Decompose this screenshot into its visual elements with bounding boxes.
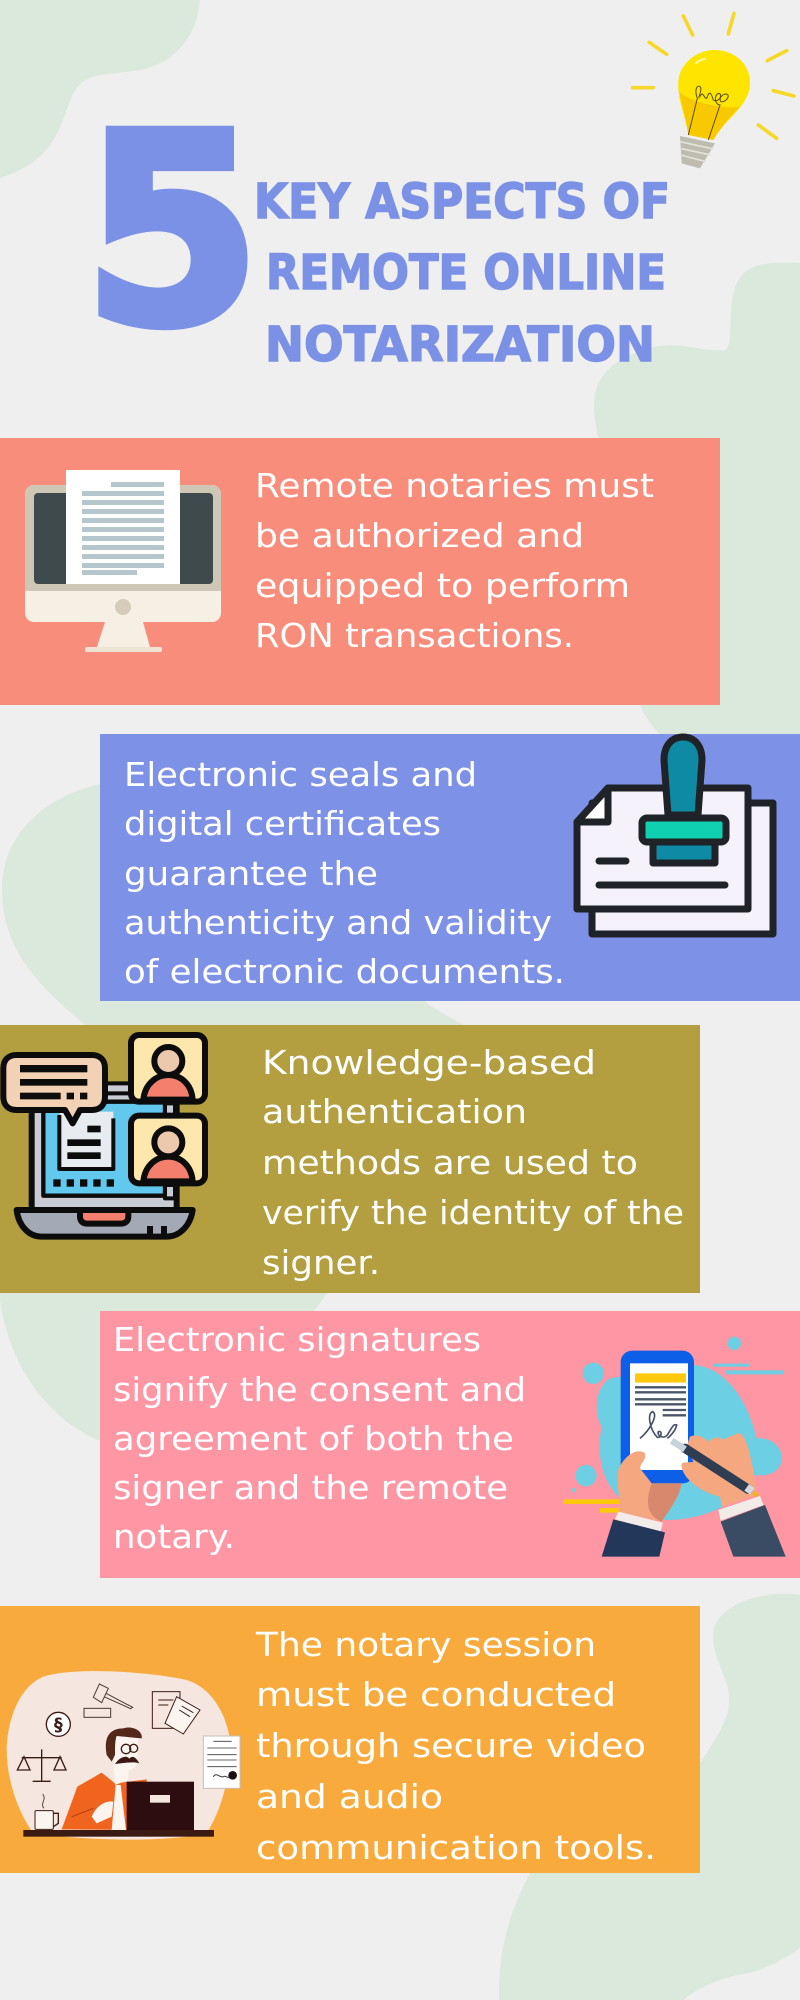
section symbol coin xyxy=(46,1712,70,1736)
text block: Electronic seals and xyxy=(124,755,477,794)
text block: be authorized and xyxy=(255,516,584,555)
heading text: NOTARIZATION xyxy=(265,317,655,373)
text block: signer and the remote xyxy=(113,1468,508,1507)
title xyxy=(83,79,670,385)
text block: agreement of both the xyxy=(113,1419,514,1458)
text block xyxy=(262,1043,684,1282)
section symbol coin: § xyxy=(54,1716,63,1736)
text block xyxy=(124,755,565,991)
heading text: REMOTE ONLINE xyxy=(266,245,666,301)
icon: hand signing on a phone xyxy=(563,1337,786,1557)
text block: Electronic signatures xyxy=(113,1320,481,1359)
panel: electronic signatures xyxy=(100,1311,800,1578)
icon: laptop with chat and video avatars xyxy=(3,1035,205,1237)
text block: digital certificates xyxy=(124,804,441,843)
icon: notary at laptop xyxy=(7,1671,240,1840)
panel: electronic seals xyxy=(100,734,800,1001)
text block: verify the identity of the xyxy=(262,1193,684,1232)
text block: notary. xyxy=(113,1517,235,1556)
gavel xyxy=(84,1684,133,1717)
coffee cup xyxy=(35,1794,58,1829)
icon: stamp on documents xyxy=(577,737,773,934)
man xyxy=(62,1727,147,1830)
text block: authentication xyxy=(262,1092,527,1131)
icon: desktop monitor with document xyxy=(25,470,221,652)
text block: signer. xyxy=(262,1243,380,1282)
text block xyxy=(113,1320,526,1556)
text block: RON transactions. xyxy=(255,616,574,655)
text block: communication tools. xyxy=(256,1828,656,1867)
panel: secure video session xyxy=(0,1606,700,1873)
text block: must be conducted xyxy=(256,1675,616,1714)
text block: methods are used to xyxy=(262,1143,638,1182)
icon: light bulb xyxy=(633,13,794,168)
text block: guarantee the xyxy=(124,854,378,893)
big number 5: 5 xyxy=(83,79,261,385)
panel: remote notaries xyxy=(0,438,720,705)
certificate xyxy=(203,1736,240,1788)
text block: authenticity and validity xyxy=(124,903,552,942)
text block: of electronic documents. xyxy=(124,952,565,991)
heading text xyxy=(254,174,670,373)
text block: through secure video xyxy=(256,1726,646,1765)
text block: signify the consent and xyxy=(113,1370,526,1409)
heading text: KEY ASPECTS OF xyxy=(254,174,670,230)
papers xyxy=(152,1692,200,1734)
text block xyxy=(255,1625,656,1867)
text block xyxy=(255,466,654,655)
scales xyxy=(17,1749,66,1781)
text block: equipped to perform xyxy=(255,566,630,605)
text block: and audio xyxy=(256,1777,443,1816)
text block: Knowledge-based xyxy=(262,1043,596,1082)
text block: The notary session xyxy=(255,1625,596,1664)
panel: knowledge-based authentication xyxy=(0,1025,700,1293)
text block: Remote notaries must xyxy=(255,466,654,505)
